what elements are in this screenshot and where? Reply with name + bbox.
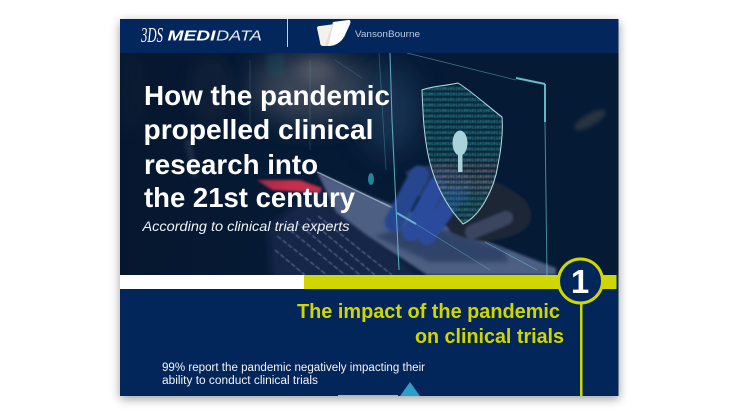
binary pattern: 101001101001011010011010010110100110 (420, 190, 518, 196)
binary pattern: 101001101001011010011010010110100110 (420, 124, 518, 130)
binary pattern: 010011010010110100101101001011010010 (420, 86, 518, 92)
binary pattern: 010011010010110100101101001011010010 (420, 185, 518, 191)
section heading: on clinical trials (415, 326, 564, 348)
binary pattern: 010011010010110100101101001011010010 (420, 141, 518, 147)
binary pattern: 010011010010110100101101001011010010 (420, 218, 518, 224)
chart top: grey bar (338, 395, 398, 396)
section connector line (580, 303, 582, 396)
lime divider bar (304, 275, 616, 289)
logo: Medidata: MEDI (168, 28, 217, 44)
binary pattern: 101001101001011010011010010110100110 (420, 202, 518, 208)
binary pattern: 101001101001011010011010010110100110 (420, 146, 518, 152)
binary pattern: 101001101001011010011010010110100110 (420, 180, 518, 186)
hand (394, 165, 531, 241)
binary pattern: 101001101001011010011010010110100110 (420, 168, 518, 174)
logo: Medidata: 3DS (140, 23, 163, 47)
statistic text (162, 362, 425, 387)
background haze (184, 53, 606, 178)
binary pattern: 010011010010110100101101001011010010 (420, 119, 518, 125)
hero title (144, 80, 390, 213)
laptop keyboard (268, 192, 419, 275)
section heading (297, 301, 564, 348)
binary pattern: 101001101001011010011010010110100110 (420, 158, 518, 164)
binary pattern: 010011010010110100101101001011010010 (420, 163, 518, 169)
statistic text: ability to conduct clinical trials (162, 375, 318, 387)
red glow (257, 180, 322, 193)
statistic text: 99% report the pandemic negatively impacting their (162, 362, 425, 374)
binary pattern: 010011010010110100101101001011010010 (420, 152, 518, 158)
header divider (287, 19, 288, 47)
chart top: blue triangle (400, 382, 420, 396)
keyhole (452, 130, 468, 172)
binary pattern: 010011010010110100101101001011010010 (420, 130, 518, 136)
logo: Vanson Bourne (317, 20, 420, 46)
binary pattern: 010011010010110100101101001011010010 (420, 174, 518, 180)
hero title: propelled clinical (144, 114, 374, 145)
binary pattern: 010011010010110100101101001011010010 (420, 196, 518, 202)
page shadow (120, 22, 619, 399)
hero subtitle: According to clinical trial experts (141, 218, 350, 234)
binary pattern: 101001101001011010011010010110100110 (420, 136, 518, 142)
logo: Medidata: DATA (216, 28, 262, 44)
left vignette (120, 53, 282, 190)
binary pattern: 010011010010110100101101001011010010 (420, 97, 518, 103)
binary pattern (422, 86, 502, 222)
binary pattern: 101001101001011010011010010110100110 (420, 102, 518, 108)
section heading: The impact of the pandemic (297, 301, 560, 323)
hero title: How the pandemic (144, 80, 390, 111)
binary pattern: 010011010010110100101101001011010010 (420, 108, 518, 114)
section number badge: 1 (571, 263, 589, 300)
binary pattern: 101001101001011010011010010110100110 (420, 92, 518, 98)
holographic frame (250, 53, 547, 275)
laptop palm rest (317, 172, 556, 275)
hero photo: hands on laptop with security shield (114, 48, 618, 285)
section number badge (558, 259, 602, 303)
teal interface dot (368, 173, 374, 185)
security shield (422, 82, 503, 225)
binary pattern: 101001101001011010011010010110100110 (420, 212, 518, 218)
page background (120, 19, 618, 396)
logo: Vanson Bourne: VansonBourne (355, 29, 420, 40)
header band (120, 19, 618, 53)
white divider bar (120, 275, 304, 289)
shield outline (422, 83, 502, 224)
infographic canvas (114, 16, 626, 406)
binary pattern: 101001101001011010011010010110100110 (420, 114, 518, 120)
logo: Medidata (140, 23, 262, 47)
hero title: research into (144, 149, 318, 180)
binary pattern: 010011010010110100101101001011010010 (420, 207, 518, 213)
hero title: the 21st century (144, 182, 355, 213)
